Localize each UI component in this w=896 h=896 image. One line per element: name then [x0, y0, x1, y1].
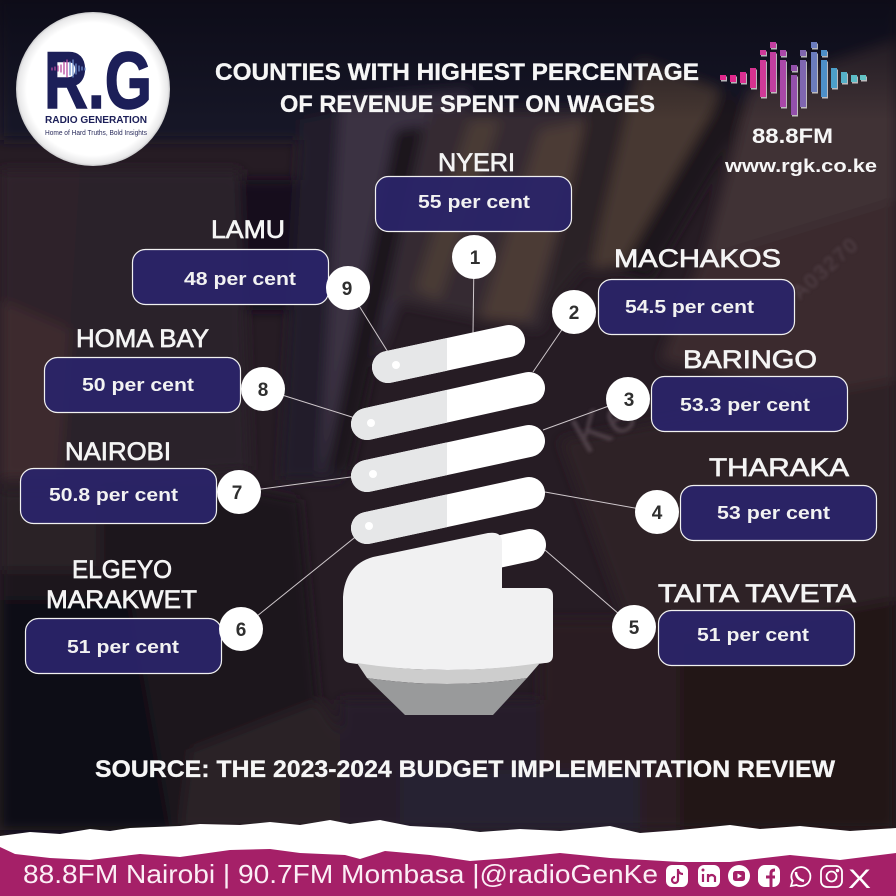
callout: Taita Taveta: TAITA TAVETA — [658, 580, 856, 608]
callout: Tharaka: THARAKA — [709, 454, 849, 482]
callout: Elgeyo Marakwet: ELGEYO — [72, 556, 172, 584]
callout: Nyeri: NYERI — [438, 149, 515, 177]
callout: Nairobi: NAIROBI — [65, 438, 171, 466]
icon: X: X — [848, 864, 871, 894]
callout: Elgeyo Marakwet: 51 per cent — [67, 637, 179, 657]
website: www.rgk.co.ke — [724, 156, 877, 176]
callout: Baringo — [606, 346, 848, 432]
callout: Baringo: 3 — [624, 390, 634, 411]
callout: Lamu — [132, 216, 370, 310]
background: blurred banknotes photo: A03270 — [789, 233, 864, 304]
callout: Machakos: 54.5 per cent — [625, 297, 754, 317]
logo letters: R.G — [44, 36, 152, 126]
logo wave — [52, 60, 85, 77]
equalizer icon — [723, 42, 864, 116]
title: OF REVENUE SPENT ON WAGES — [280, 91, 655, 118]
callout: Homa Bay: 50 per cent — [82, 375, 194, 395]
callout: Nairobi: 50.8 per cent — [49, 485, 178, 505]
bulb neck — [357, 663, 540, 684]
callout: Nyeri — [376, 149, 572, 279]
callout: Tharaka: 4 — [652, 503, 663, 524]
callout: Elgeyo Marakwet: 6 — [236, 620, 246, 641]
icon: YouTube — [728, 865, 750, 887]
callout: Machakos: 2 — [569, 303, 579, 324]
connector dots — [365, 361, 400, 530]
icon: TikTok — [666, 865, 688, 887]
callout: Nyeri: 55 per cent — [418, 192, 530, 212]
footer: magenta strip — [0, 847, 896, 896]
callout: Baringo: 53.3 per cent — [680, 395, 810, 415]
background: blurred banknotes photo: Ke — [562, 383, 646, 465]
callout: Nyeri: 1 — [470, 248, 481, 269]
callout: Lamu: 48 per cent — [184, 269, 296, 289]
callout: Machakos: MACHAKOS — [614, 245, 781, 273]
icon: WhatsApp — [791, 867, 810, 886]
callout: Homa Bay — [44, 325, 285, 412]
connector lines — [239, 257, 657, 629]
callout: Lamu: LAMU — [211, 216, 285, 244]
title — [215, 59, 699, 118]
callout: Homa Bay: 8 — [258, 380, 268, 401]
callout: Taita Taveta — [612, 580, 856, 666]
callout: Taita Taveta: 5 — [629, 618, 640, 639]
logo badge — [16, 12, 170, 166]
callout: Elgeyo Marakwet: MARAKWET — [46, 586, 197, 614]
footer: torn paper band — [0, 820, 896, 896]
callout: Homa Bay: HOMA BAY — [76, 325, 209, 353]
callout: Elgeyo Marakwet — [26, 556, 263, 674]
callout: Nairobi — [20, 438, 261, 524]
callout: Taita Taveta: 51 per cent — [697, 625, 809, 645]
social icons — [666, 864, 871, 894]
bulb tip — [367, 678, 527, 715]
bulb collar — [343, 533, 553, 670]
title: COUNTIES WITH HIGHEST PERCENTAGE — [215, 59, 699, 86]
logo tagline: Home of Hard Truths, Bold Insights — [45, 130, 147, 137]
callout: Lamu: 9 — [342, 279, 352, 300]
callout: Machakos — [552, 245, 794, 334]
logo name: RADIO GENERATION — [45, 115, 147, 126]
callout: Tharaka — [635, 454, 876, 540]
callout: Tharaka: 53 per cent — [717, 503, 830, 523]
station frequency: 88.8FM — [752, 125, 833, 148]
icon: Instagram — [821, 866, 842, 887]
source line: SOURCE: THE 2023-2024 BUDGET IMPLEMENTATION REVIEW — [95, 756, 835, 783]
bulb coils — [367, 341, 530, 558]
footer text: 88.8FM Nairobi | 90.7FM Mombasa |@radioGenKe — [23, 859, 658, 889]
bulb — [343, 341, 553, 715]
icon: Facebook — [758, 865, 780, 887]
callout: Nairobi: 7 — [232, 483, 242, 504]
callout: Baringo: BARINGO — [683, 346, 817, 374]
icon: LinkedIn — [698, 865, 720, 887]
